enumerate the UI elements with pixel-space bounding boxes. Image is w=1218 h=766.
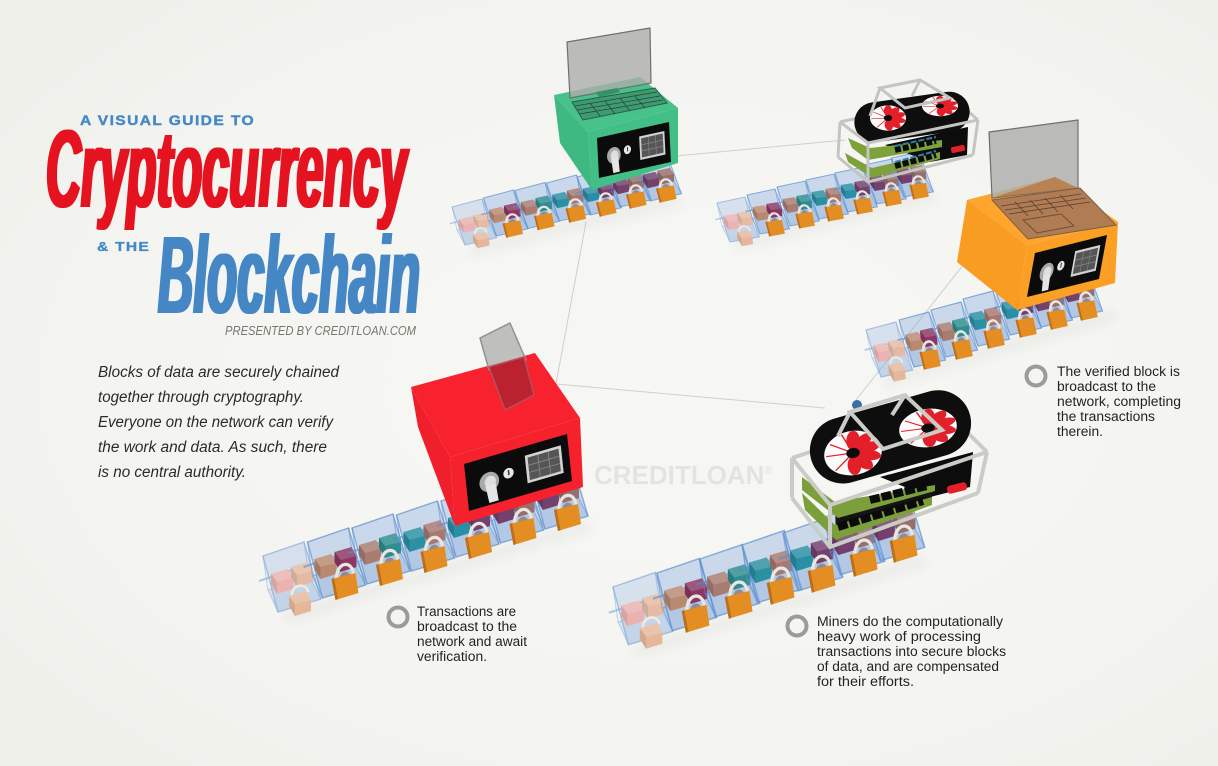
safe door panel: [597, 122, 671, 178]
safe body: [957, 177, 1118, 310]
fan shroud: [852, 89, 972, 145]
small node behind rig: [852, 400, 862, 410]
laptop keyboard: [572, 88, 667, 120]
fans: [870, 105, 906, 131]
title block: [46, 108, 420, 338]
chain row: bottom left, red safe: [259, 459, 588, 616]
intro text: is no central authority.: [98, 464, 246, 481]
presenter credit: PRESENTED BY CREDITLOAN.COM: [225, 324, 417, 338]
rear frame: [840, 97, 978, 122]
step text: verification.: [417, 649, 487, 664]
title kicker: A VISUAL GUIDE TO: [80, 113, 255, 128]
metal frame: [792, 395, 987, 547]
step text: broadcast to the: [1057, 379, 1156, 394]
laptop base: [992, 188, 1116, 239]
laptop screen: [567, 28, 651, 98]
watermark: ®: [764, 465, 773, 477]
text: Cryptocurrency: [46, 108, 409, 231]
step marker: [788, 616, 806, 636]
step text: Miners do the computationally: [817, 614, 1003, 629]
watermark: CREDITLOAN: [594, 460, 764, 490]
step marker: [388, 608, 408, 626]
chain row: right, orange safe: [862, 259, 1104, 384]
step text: [1057, 364, 1181, 439]
step text: therein.: [1057, 424, 1103, 439]
step marker: [1026, 366, 1046, 386]
black card body: [880, 452, 973, 497]
step text: heavy work of processing: [817, 629, 981, 644]
intro text: the work and data. As such, there: [98, 439, 327, 456]
safe body: [411, 353, 583, 526]
fans: [824, 428, 883, 478]
black card body: [885, 127, 968, 162]
power switch: [946, 482, 968, 494]
step text: the transactions: [1057, 409, 1155, 424]
text: Blockchain: [158, 214, 420, 337]
intro text: [98, 364, 340, 481]
step text: Transactions are: [417, 604, 516, 619]
orange safe with laptop: [957, 120, 1118, 310]
circuit boards: [845, 137, 942, 178]
title connector: & THE: [97, 240, 150, 254]
step text: transactions into secure blocks: [817, 644, 1006, 659]
network connection lines: [556, 140, 995, 408]
safe body: [554, 77, 678, 190]
large miner rig: [792, 382, 987, 547]
step text: network and await: [417, 634, 527, 649]
chain row: bottom center, large miner: [609, 489, 925, 649]
chain row: top left, green safe: [449, 153, 682, 249]
step text: The verified block is: [1057, 364, 1180, 379]
soft ground shadows: [285, 195, 1115, 652]
step text: for their efforts.: [817, 674, 914, 689]
callout: step 2 miners: [788, 614, 1006, 689]
step text: of data, and are compensated: [817, 659, 999, 674]
laptop screen: [989, 120, 1078, 198]
chain row: top right, small miner: [714, 148, 934, 248]
small miner rig: [838, 80, 978, 182]
intro text: together through cryptography.: [98, 389, 304, 406]
rear frame: [792, 408, 987, 458]
screen overlap on safe: [992, 177, 1078, 198]
step text: broadcast to the: [417, 619, 517, 634]
step text: [417, 604, 527, 664]
step text: network, completing: [1057, 394, 1181, 409]
phone over safe: [489, 357, 534, 410]
intro text: Blocks of data are securely chained: [98, 364, 340, 381]
metal frame: [838, 80, 978, 182]
green safe with laptop: [554, 28, 678, 190]
safe door panel: [1027, 235, 1107, 297]
red safe with phone: [411, 323, 583, 526]
callout: step 3 verified block: [1026, 364, 1181, 439]
intro text: Everyone on the network can verify: [98, 414, 334, 431]
safe door panel: [464, 434, 572, 511]
power switch: [951, 145, 965, 153]
phone upper part: [480, 323, 526, 370]
fan shroud: [802, 382, 979, 491]
circuit boards: [802, 477, 935, 540]
callout: step 1 transactions: [388, 604, 527, 664]
step text: [817, 614, 1006, 689]
